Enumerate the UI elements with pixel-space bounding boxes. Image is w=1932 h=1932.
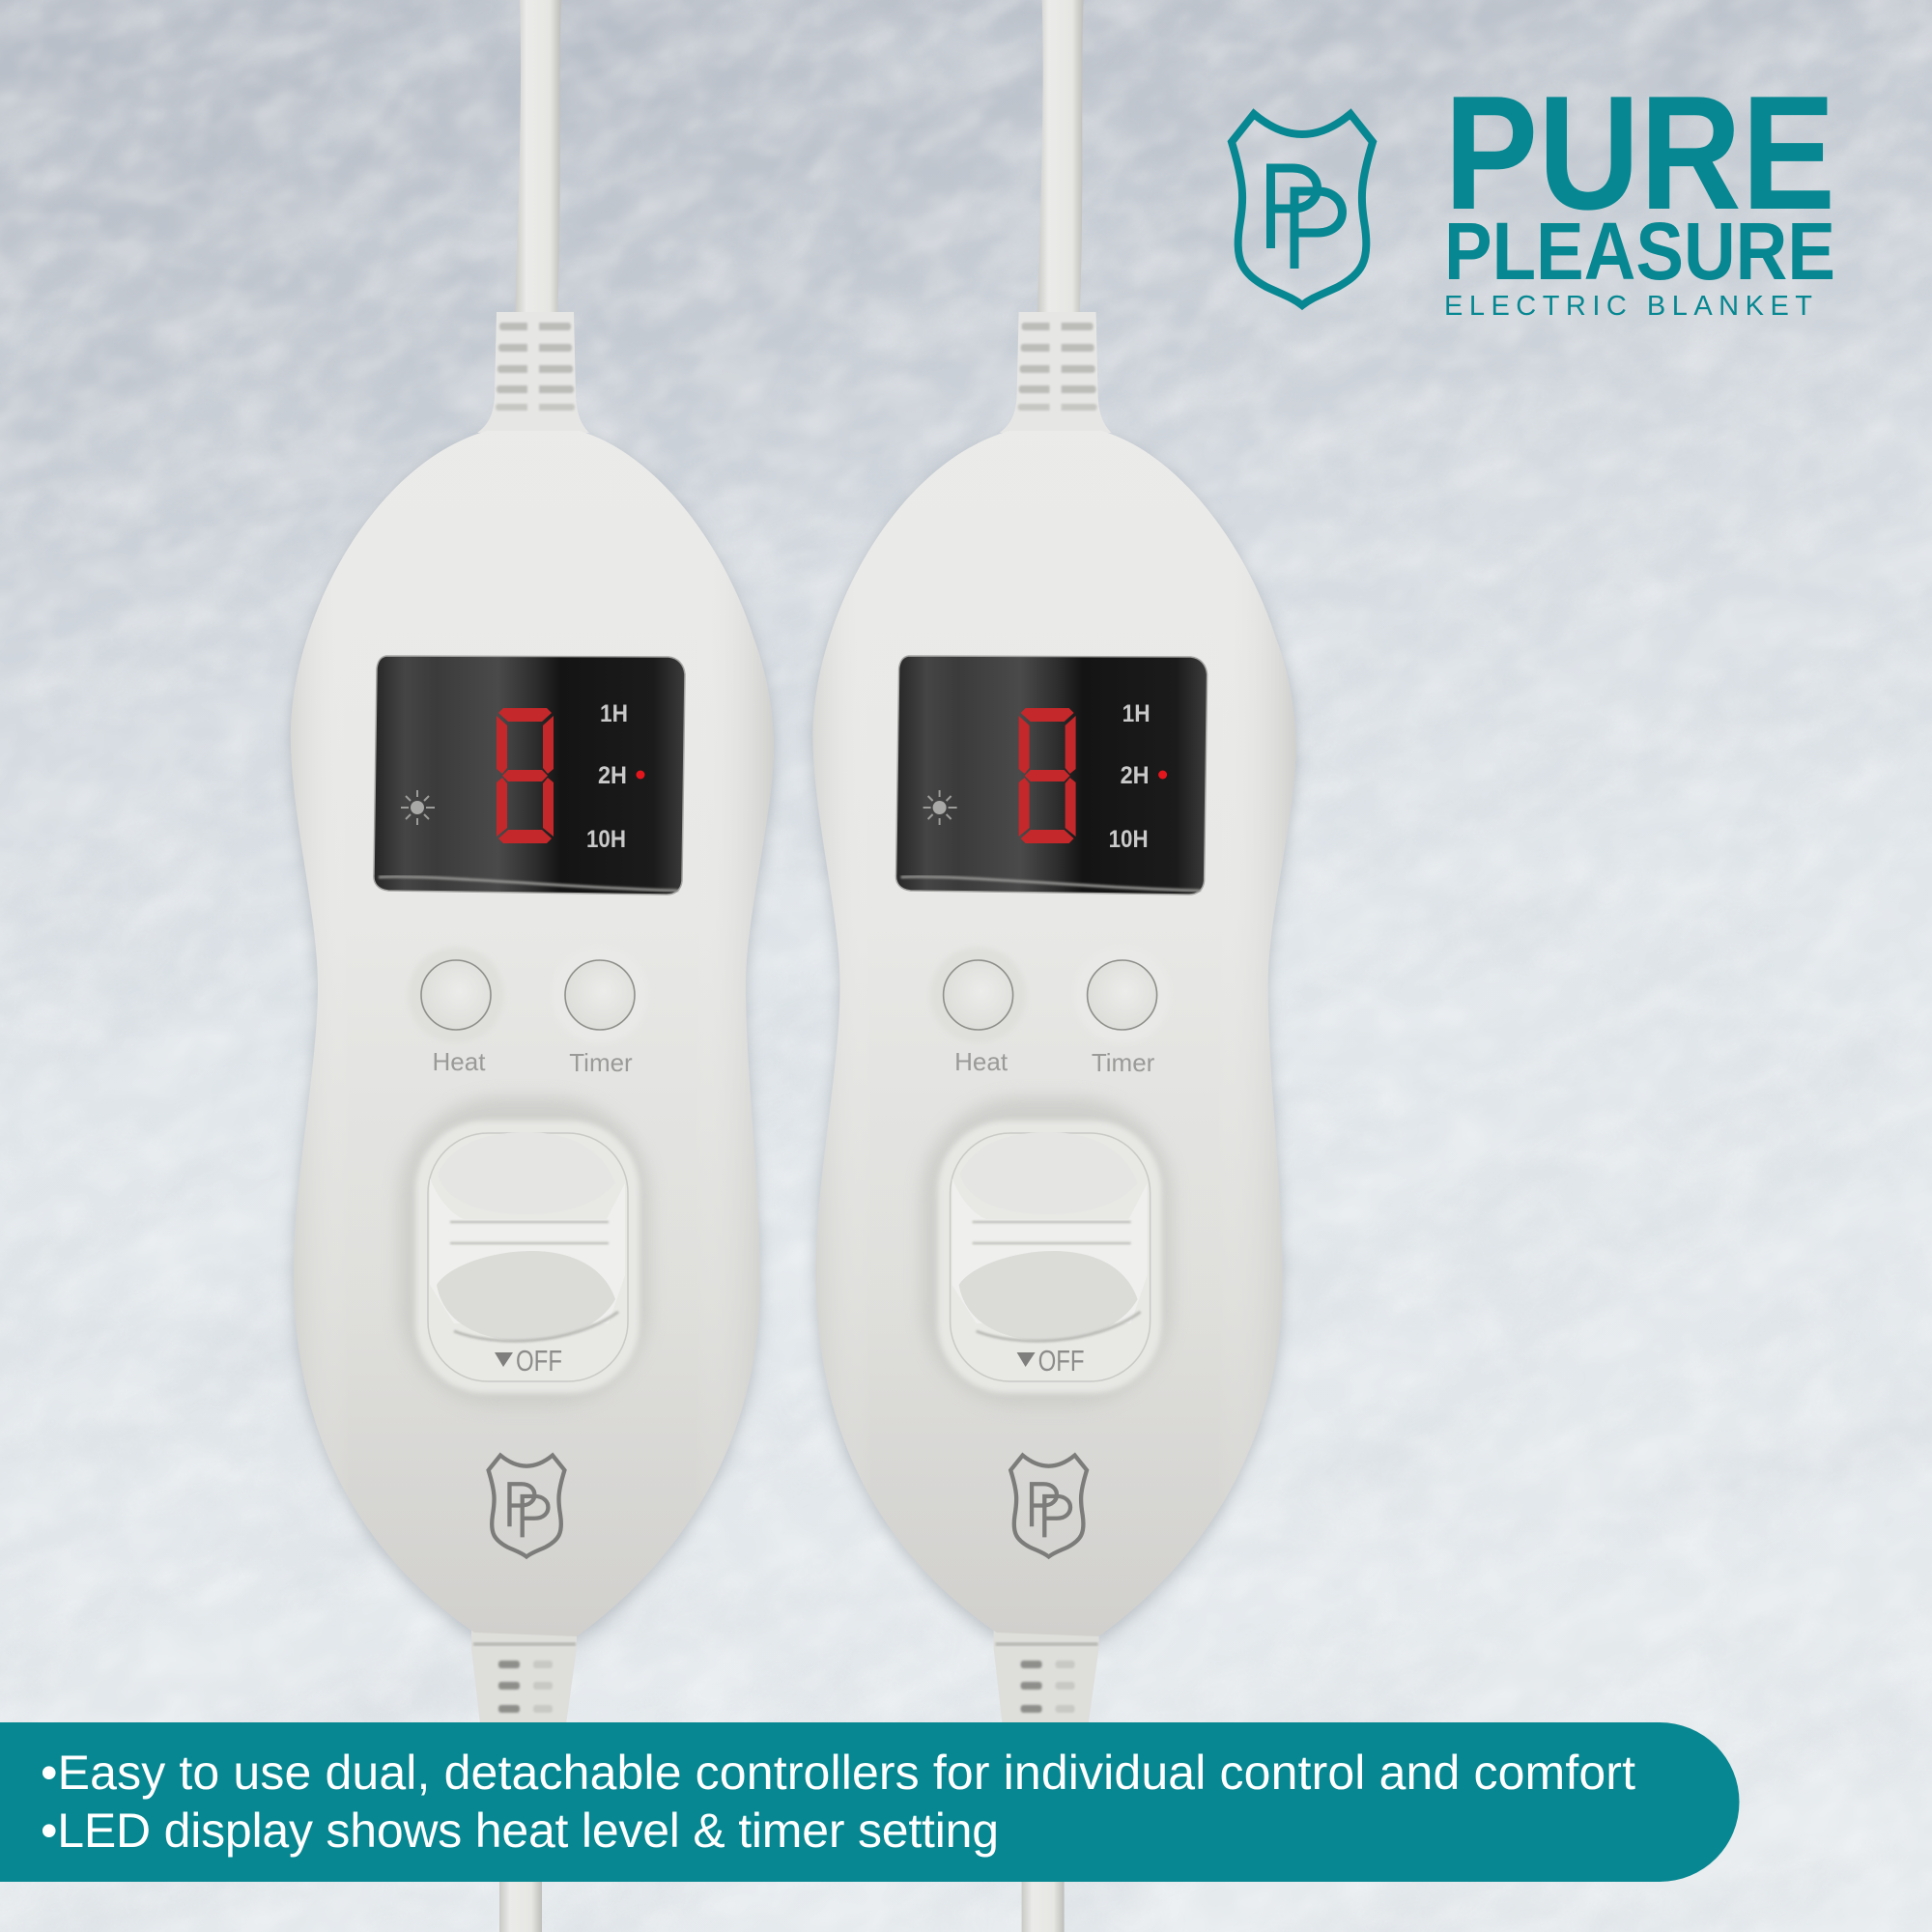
controller shadow [291, 436, 774, 1641]
heat button [930, 947, 1027, 1043]
timer button [1074, 947, 1171, 1043]
wordmark: PLEASURE: PLEASURE [1444, 206, 1835, 297]
heat label: Heat [954, 1047, 1009, 1076]
brand logo [1232, 62, 1835, 322]
cable top [1037, 0, 1084, 319]
feature line 2: •LED display shows heat level & timer setting [41, 1804, 999, 1858]
off label: OFF [1038, 1344, 1085, 1378]
heat label: Heat [433, 1047, 486, 1076]
timer label: Timer [569, 1048, 633, 1077]
left controller [291, 0, 774, 1932]
body edge shading [291, 431, 774, 1636]
LED display [374, 656, 685, 895]
controller shadow [812, 436, 1296, 1641]
cable top [515, 0, 561, 319]
feature line 1: •Easy to use dual, detachable controllers for individual control and comfort [41, 1746, 1635, 1800]
body edge shading [812, 431, 1296, 1636]
timer labels: 1H [1122, 700, 1151, 727]
top strain relief [1000, 312, 1112, 433]
feature banner [0, 1722, 1739, 1882]
red indicator dot [1158, 771, 1167, 779]
off label [1017, 1344, 1085, 1378]
slider switch [398, 1096, 651, 1407]
timer button [552, 947, 648, 1043]
bottom strain relief [471, 1627, 577, 1724]
slider switch [921, 1096, 1174, 1407]
seven-segment digit 8 [1019, 708, 1076, 843]
off label: OFF [516, 1344, 562, 1378]
icon: sun [401, 790, 435, 825]
controller body [291, 431, 774, 1636]
icon: sun [923, 790, 957, 825]
off label [495, 1344, 562, 1378]
heat button [408, 947, 504, 1043]
timer label: Timer [1092, 1048, 1155, 1077]
timer labels: 1H [600, 700, 628, 727]
right controller [812, 0, 1296, 1932]
LED display: 2H [598, 762, 627, 789]
icon: PP shield [1232, 114, 1373, 305]
cable bottom [499, 1710, 542, 1932]
controller body [812, 431, 1296, 1636]
LED display: 2H [1121, 762, 1150, 789]
tagline: ELECTRIC BLANKET [1444, 291, 1812, 322]
LED display [895, 656, 1208, 895]
bottom strain relief [994, 1627, 1099, 1724]
shield logo on controller [489, 1456, 564, 1556]
cable bottom [1022, 1710, 1065, 1932]
LED display: 10H [1109, 826, 1149, 853]
top strain relief [477, 312, 589, 433]
wordmark: PURE: PURE [1444, 62, 1835, 243]
LED display: 10H [586, 826, 626, 853]
seven-segment digit 8 [497, 708, 554, 843]
red indicator dot [636, 771, 645, 779]
shield logo on controller [1010, 1456, 1087, 1556]
